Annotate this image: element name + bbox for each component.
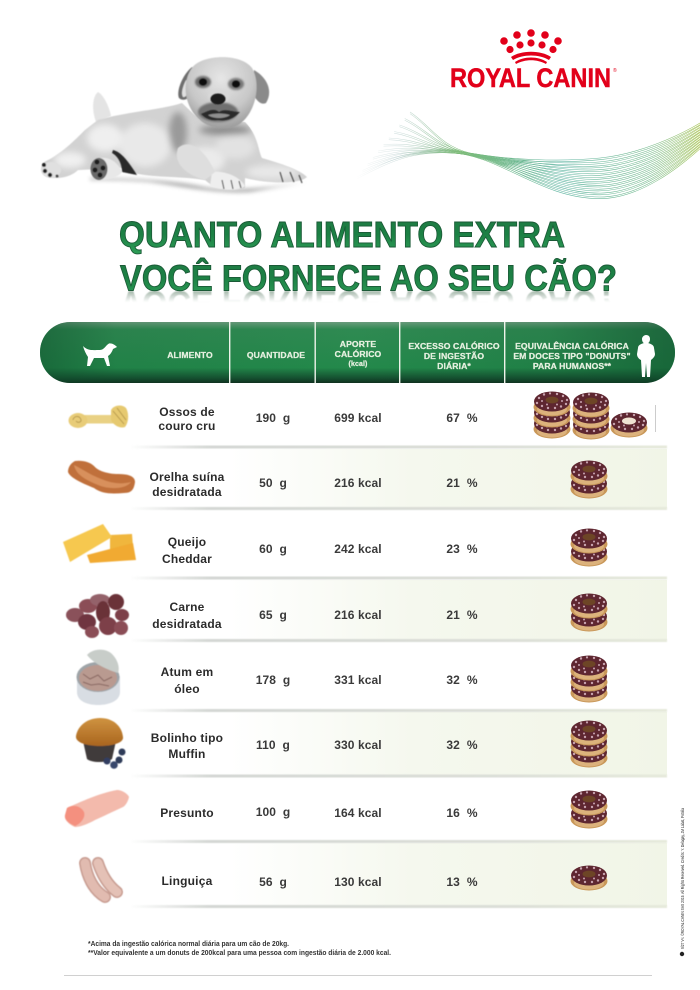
row 7: presunto [65, 790, 607, 828]
logo wordmark: ROYAL CANIN [450, 63, 611, 93]
donuts [570, 460, 608, 498]
label: Ossos de [159, 405, 215, 419]
icon: dog [83, 343, 117, 366]
kcal: 242 kcal [334, 542, 382, 556]
icon: cheese [63, 524, 136, 563]
row 4: carne: desidratada [152, 617, 222, 631]
quantity: 190 g [256, 411, 290, 425]
header label: aporte calórico: (kcal) [349, 361, 367, 368]
donuts [570, 656, 608, 702]
row 1: ossos de couro cru: couro cru [158, 419, 216, 433]
logo crown [500, 29, 562, 64]
donuts [570, 594, 608, 632]
footnotes [88, 939, 391, 957]
table header [40, 322, 675, 383]
puppy ground shadow [90, 178, 308, 192]
quantity: 110 g [256, 738, 290, 752]
donut [570, 866, 608, 890]
kcal: 331 kcal [334, 673, 382, 687]
icon: pig ear [68, 461, 135, 493]
quantity: 100 g [256, 805, 290, 819]
title: VOCÊ FORNECE AO SEU CÃO? [120, 256, 617, 298]
body silhouette [42, 103, 307, 190]
header label: quantidade: QUANTIDADE [247, 350, 305, 360]
mouth [201, 110, 240, 120]
ears [178, 67, 197, 100]
percent: 32 % [446, 738, 478, 752]
kcal: 216 kcal [334, 608, 382, 622]
title reflection: VOCÊ FORNECE AO SEU CÃO? [120, 283, 617, 325]
decorative wave [357, 112, 700, 199]
row 5: atum: óleo [174, 682, 200, 696]
percent: 23 % [446, 542, 478, 556]
icon: ham [65, 790, 129, 827]
header label: alimento: ALIMENTO [167, 350, 213, 360]
footnotes: **Valor equivalente a um donuts de 200kcal para uma pessoa com ingestão diária de 2.000 kcal. [88, 948, 391, 957]
vertical credits: 9/27 V-I. ©ROYAL CANIN SAS 2019. All Rights Reserved. Credits: Y. Delagay, JM Labat, Fotolia [680, 808, 685, 949]
front paws [210, 172, 245, 190]
percent: 67 % [446, 411, 478, 425]
row 5: atum [76, 650, 608, 705]
puppy photo [41, 57, 308, 192]
header label: aporte calórico [335, 339, 382, 368]
quantity: 60 g [259, 542, 287, 556]
label: Queijo [168, 535, 206, 549]
label: Atum em [161, 665, 213, 679]
label: Carne [169, 600, 205, 614]
label: Linguiça [162, 874, 213, 888]
row bands and dividers [130, 446, 667, 908]
icon: dried meat [66, 594, 129, 638]
header label: aporte calórico: CALÓRICO [335, 348, 382, 359]
percent: 13 % [446, 875, 478, 889]
kcal: 699 kcal [334, 411, 382, 425]
quantity: 50 g [259, 476, 287, 490]
muzzle shading [198, 102, 238, 122]
row 1: ossos de couro cru [68, 392, 648, 440]
donuts [570, 528, 608, 566]
header label: excesso calórico: EXCESSO CALÓRICO [408, 340, 500, 351]
header label: equivalência: EM DOCES TIPO "DONUTS" [513, 351, 631, 361]
header label: excesso calórico: DE INGESTÃO [424, 351, 484, 361]
row 6: muffin: Muffin [168, 747, 206, 761]
percent: 32 % [446, 673, 478, 687]
kcal: 164 kcal [334, 806, 382, 820]
kcal: 216 kcal [334, 476, 382, 490]
icon: muffin [76, 718, 126, 769]
rear leg [100, 158, 122, 180]
title: QUANTO ALIMENTO EXTRA [119, 214, 565, 255]
row 8: linguiça [85, 863, 608, 897]
donuts [534, 392, 648, 440]
eyes [199, 78, 207, 86]
head [186, 57, 257, 128]
label: Orelha suína [149, 470, 225, 484]
hind paw [41, 162, 61, 178]
quantity: 178 g [256, 673, 290, 687]
icon: rawhide bone [68, 406, 128, 428]
icon: sausages [85, 863, 117, 897]
donuts [570, 790, 608, 828]
percent: 21 % [446, 476, 478, 490]
percent: 16 % [446, 806, 478, 820]
fur highlights [54, 112, 298, 179]
title [119, 214, 617, 298]
header label: aporte calórico: APORTE [340, 339, 376, 349]
kcal: 330 kcal [334, 738, 382, 752]
footer rule [64, 975, 652, 976]
label: Bolinho tipo [151, 731, 223, 745]
header label: equivalência: PARA HUMANOS** [533, 361, 612, 371]
tail [93, 92, 111, 122]
header label: excesso calórico: DIÁRIA* [437, 361, 471, 371]
row 2: orelha suína [68, 460, 608, 499]
nose [210, 94, 226, 104]
kcal: 130 kcal [334, 875, 382, 889]
header label: equivalência [513, 340, 631, 371]
donuts [570, 720, 608, 768]
small mark [655, 405, 656, 432]
header label: equivalência: EQUIVALÊNCIA CALÓRICA [515, 340, 629, 351]
icon: person [637, 335, 655, 377]
eye shading [195, 76, 211, 88]
label: Presunto [160, 806, 214, 820]
Royal Canin logo: ® [613, 67, 617, 74]
Royal Canin logo [450, 29, 617, 93]
percent: 21 % [446, 608, 478, 622]
icon: tuna can [76, 650, 120, 705]
row 3: queijo: Cheddar [162, 552, 212, 566]
row 3: queijo [63, 524, 608, 566]
row 6: muffin [76, 718, 607, 769]
row 4: carne [66, 594, 608, 638]
dark belly [112, 150, 137, 175]
footnotes: *Acima da ingestão calórica normal diária para um cão de 20kg. [88, 939, 289, 948]
rear paw pads [90, 158, 108, 180]
row 2: orelha suína: desidratada [152, 485, 222, 499]
quantity: 56 g [259, 875, 287, 889]
quantity: 65 g [259, 608, 287, 622]
header label: excesso calórico [408, 340, 500, 371]
